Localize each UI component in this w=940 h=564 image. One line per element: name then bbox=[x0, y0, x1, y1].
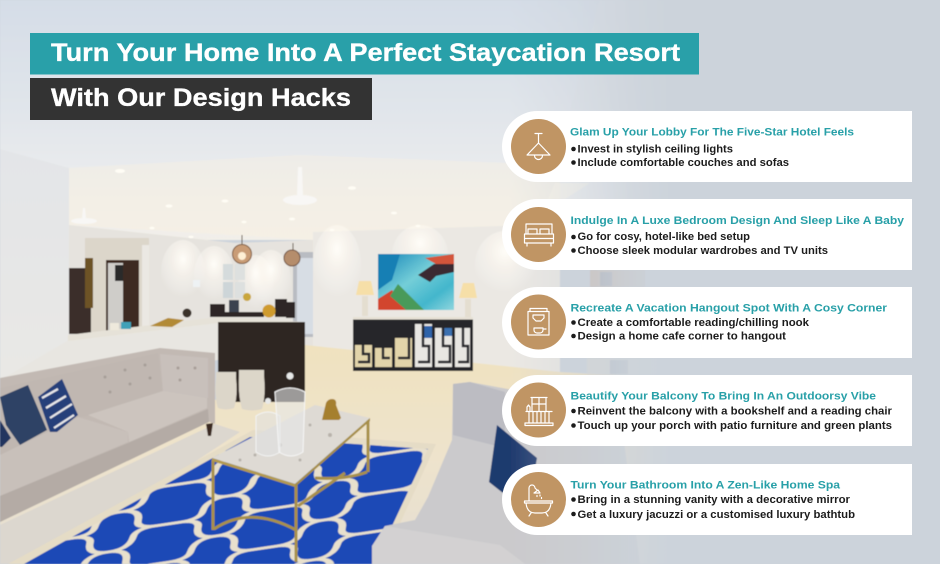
bedroom bullets bbox=[571, 231, 828, 257]
ceiling fans bbox=[71, 167, 317, 224]
cosy corner bullets bbox=[571, 317, 810, 342]
cosy corner bullets: Design a home cafe corner to hangout bbox=[578, 330, 786, 342]
lobby bullets bbox=[571, 144, 789, 169]
sofa pillows bbox=[0, 379, 78, 447]
pendant lights bbox=[232, 235, 300, 266]
half wall and counter bbox=[0, 293, 305, 402]
panel: bathroom bbox=[502, 464, 912, 535]
stools bbox=[215, 370, 265, 410]
coffee table bbox=[212, 405, 370, 562]
title banner: teal bbox=[30, 33, 699, 74]
panel: lobby bbox=[502, 111, 912, 182]
panel: cosy corner bbox=[502, 287, 912, 358]
ceiling spot lights bbox=[115, 169, 420, 238]
title banner: teal: Turn Your Home Into A Perfect Staycation Resort bbox=[51, 39, 681, 67]
bathroom heading: Turn Your Bathroom Into A Zen-Like Home Spa bbox=[570, 480, 841, 492]
painting bbox=[378, 254, 454, 310]
dining set bbox=[210, 299, 295, 318]
panel: balcony bbox=[502, 375, 912, 446]
bathroom bullets: Get a luxury jacuzzi or a customised luxury bathtub bbox=[578, 509, 855, 521]
title banner: dark: With Our Design Hacks bbox=[51, 84, 351, 112]
buddha statue bbox=[322, 399, 341, 420]
bedroom bullets: Choose sleek modular wardrobes and TV units bbox=[578, 245, 828, 257]
icon: bathtub bbox=[524, 485, 552, 516]
bathroom bullets bbox=[571, 494, 855, 521]
icon: coffee machine bbox=[528, 308, 549, 335]
right wall bbox=[313, 224, 560, 372]
bathroom bullets: Bring in a stunning vanity with a decorative mirror bbox=[578, 494, 851, 506]
balcony bullets bbox=[571, 406, 893, 432]
lobby bullets: Invest in stylish ceiling lights bbox=[578, 144, 733, 156]
panel: bedroom bbox=[502, 199, 912, 270]
back wall with opening bbox=[69, 225, 313, 350]
balcony bullets: Touch up your porch with patio furniture and green plants bbox=[578, 420, 892, 432]
title banner: dark bbox=[30, 78, 372, 120]
lobby heading: Glam Up Your Lobby For The Five-Star Hotel Feels bbox=[570, 126, 854, 138]
right sofa bbox=[372, 382, 640, 564]
icon: balcony bbox=[525, 398, 553, 426]
left wall pillar bbox=[0, 149, 69, 380]
bedroom bullets: Go for cosy, hotel-like bed setup bbox=[578, 231, 750, 243]
floor bbox=[0, 345, 700, 564]
cosy corner bullets: Create a comfortable reading/chilling nook bbox=[578, 317, 810, 329]
glass jars bbox=[256, 372, 305, 456]
faded curtain behind cards bbox=[548, 0, 660, 375]
right fade overlay bbox=[510, 0, 670, 564]
lobby bullets: Include comfortable couches and sofas bbox=[578, 157, 789, 169]
rug bbox=[8, 430, 436, 564]
cosy corner heading: Recreate A Vacation Hangout Spot With A Cosy Corner bbox=[570, 302, 888, 314]
left sofa bbox=[0, 348, 215, 522]
sideboard bbox=[353, 317, 473, 371]
balcony bullets: Reinvent the balcony with a bookshelf and a reading chair bbox=[578, 406, 893, 418]
icon: ceiling lamp bbox=[527, 134, 550, 160]
icon: bed bbox=[524, 224, 554, 246]
table lamps bbox=[356, 281, 477, 318]
balcony heading: Beautify Your Balcony To Bring In An Outdoorsy Vibe bbox=[570, 390, 876, 402]
bedroom heading: Indulge In A Luxe Bedroom Design And Sleep Like A Baby bbox=[570, 215, 905, 227]
